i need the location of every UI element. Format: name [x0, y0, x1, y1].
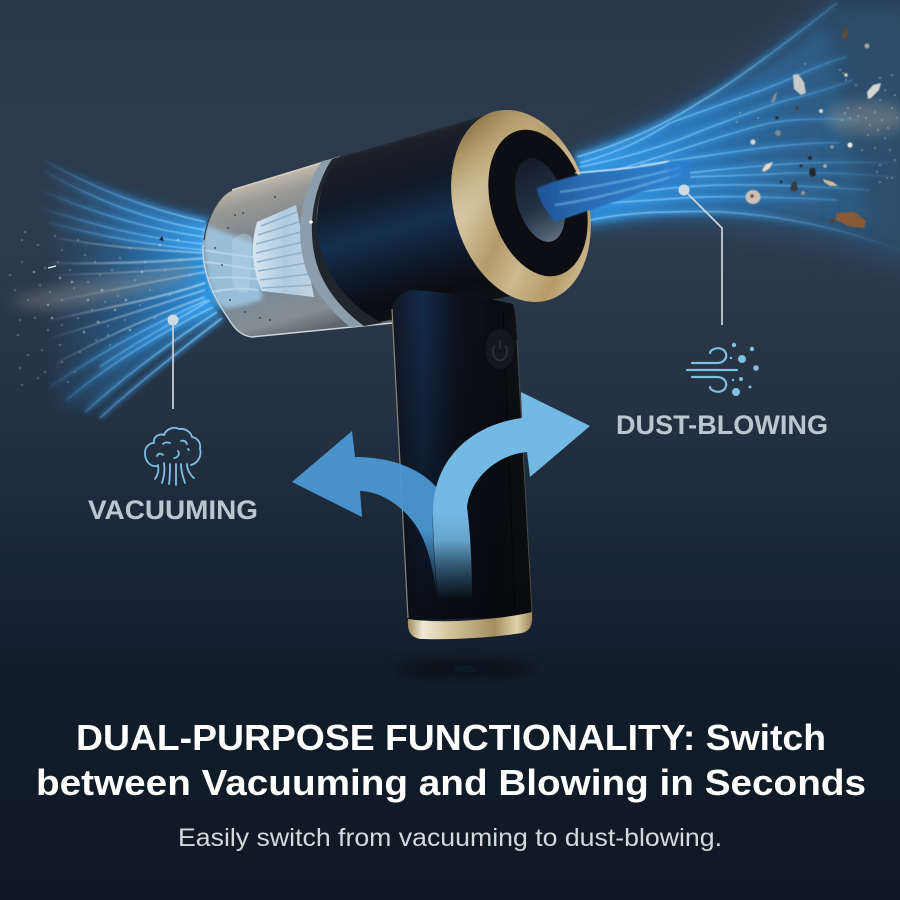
- body barrel: [317, 115, 540, 322]
- gold base: [408, 612, 532, 639]
- label: VACUUMING: [88, 495, 258, 525]
- left dust cloud: [10, 232, 190, 385]
- callout: dust-blowing: [616, 184, 828, 440]
- right airflow stream: [572, 0, 900, 270]
- left arrow: vacuuming direction: [292, 431, 437, 597]
- title: DUAL-PURPOSE FUNCTIONALITY: Switch: [76, 717, 826, 758]
- icon: vacuum cloud: [145, 428, 201, 485]
- label: DUST-BLOWING: [616, 410, 828, 440]
- right arrow: blowing direction: [433, 392, 590, 597]
- callout leader line: [168, 314, 178, 409]
- handle: [392, 290, 532, 620]
- icon: wind and particles: [687, 343, 759, 396]
- power button: [486, 329, 514, 369]
- gold ring: [430, 93, 612, 319]
- callout: vacuuming: [88, 314, 258, 525]
- left airflow stream: [20, 160, 222, 418]
- right dust and debris: [737, 28, 900, 228]
- floor shadow: [393, 664, 537, 674]
- metal rings: [300, 156, 382, 327]
- filter element: [232, 205, 314, 297]
- callout leader line: [678, 184, 722, 325]
- dust cup: [203, 157, 392, 337]
- title: [36, 717, 866, 803]
- subtitle: Easily switch from vacuuming to dust-blowing.: [178, 824, 722, 852]
- vacuum device: [203, 93, 695, 639]
- title: between Vacuuming and Blowing in Seconds: [36, 762, 866, 803]
- blue air tube from nozzle: [537, 160, 695, 222]
